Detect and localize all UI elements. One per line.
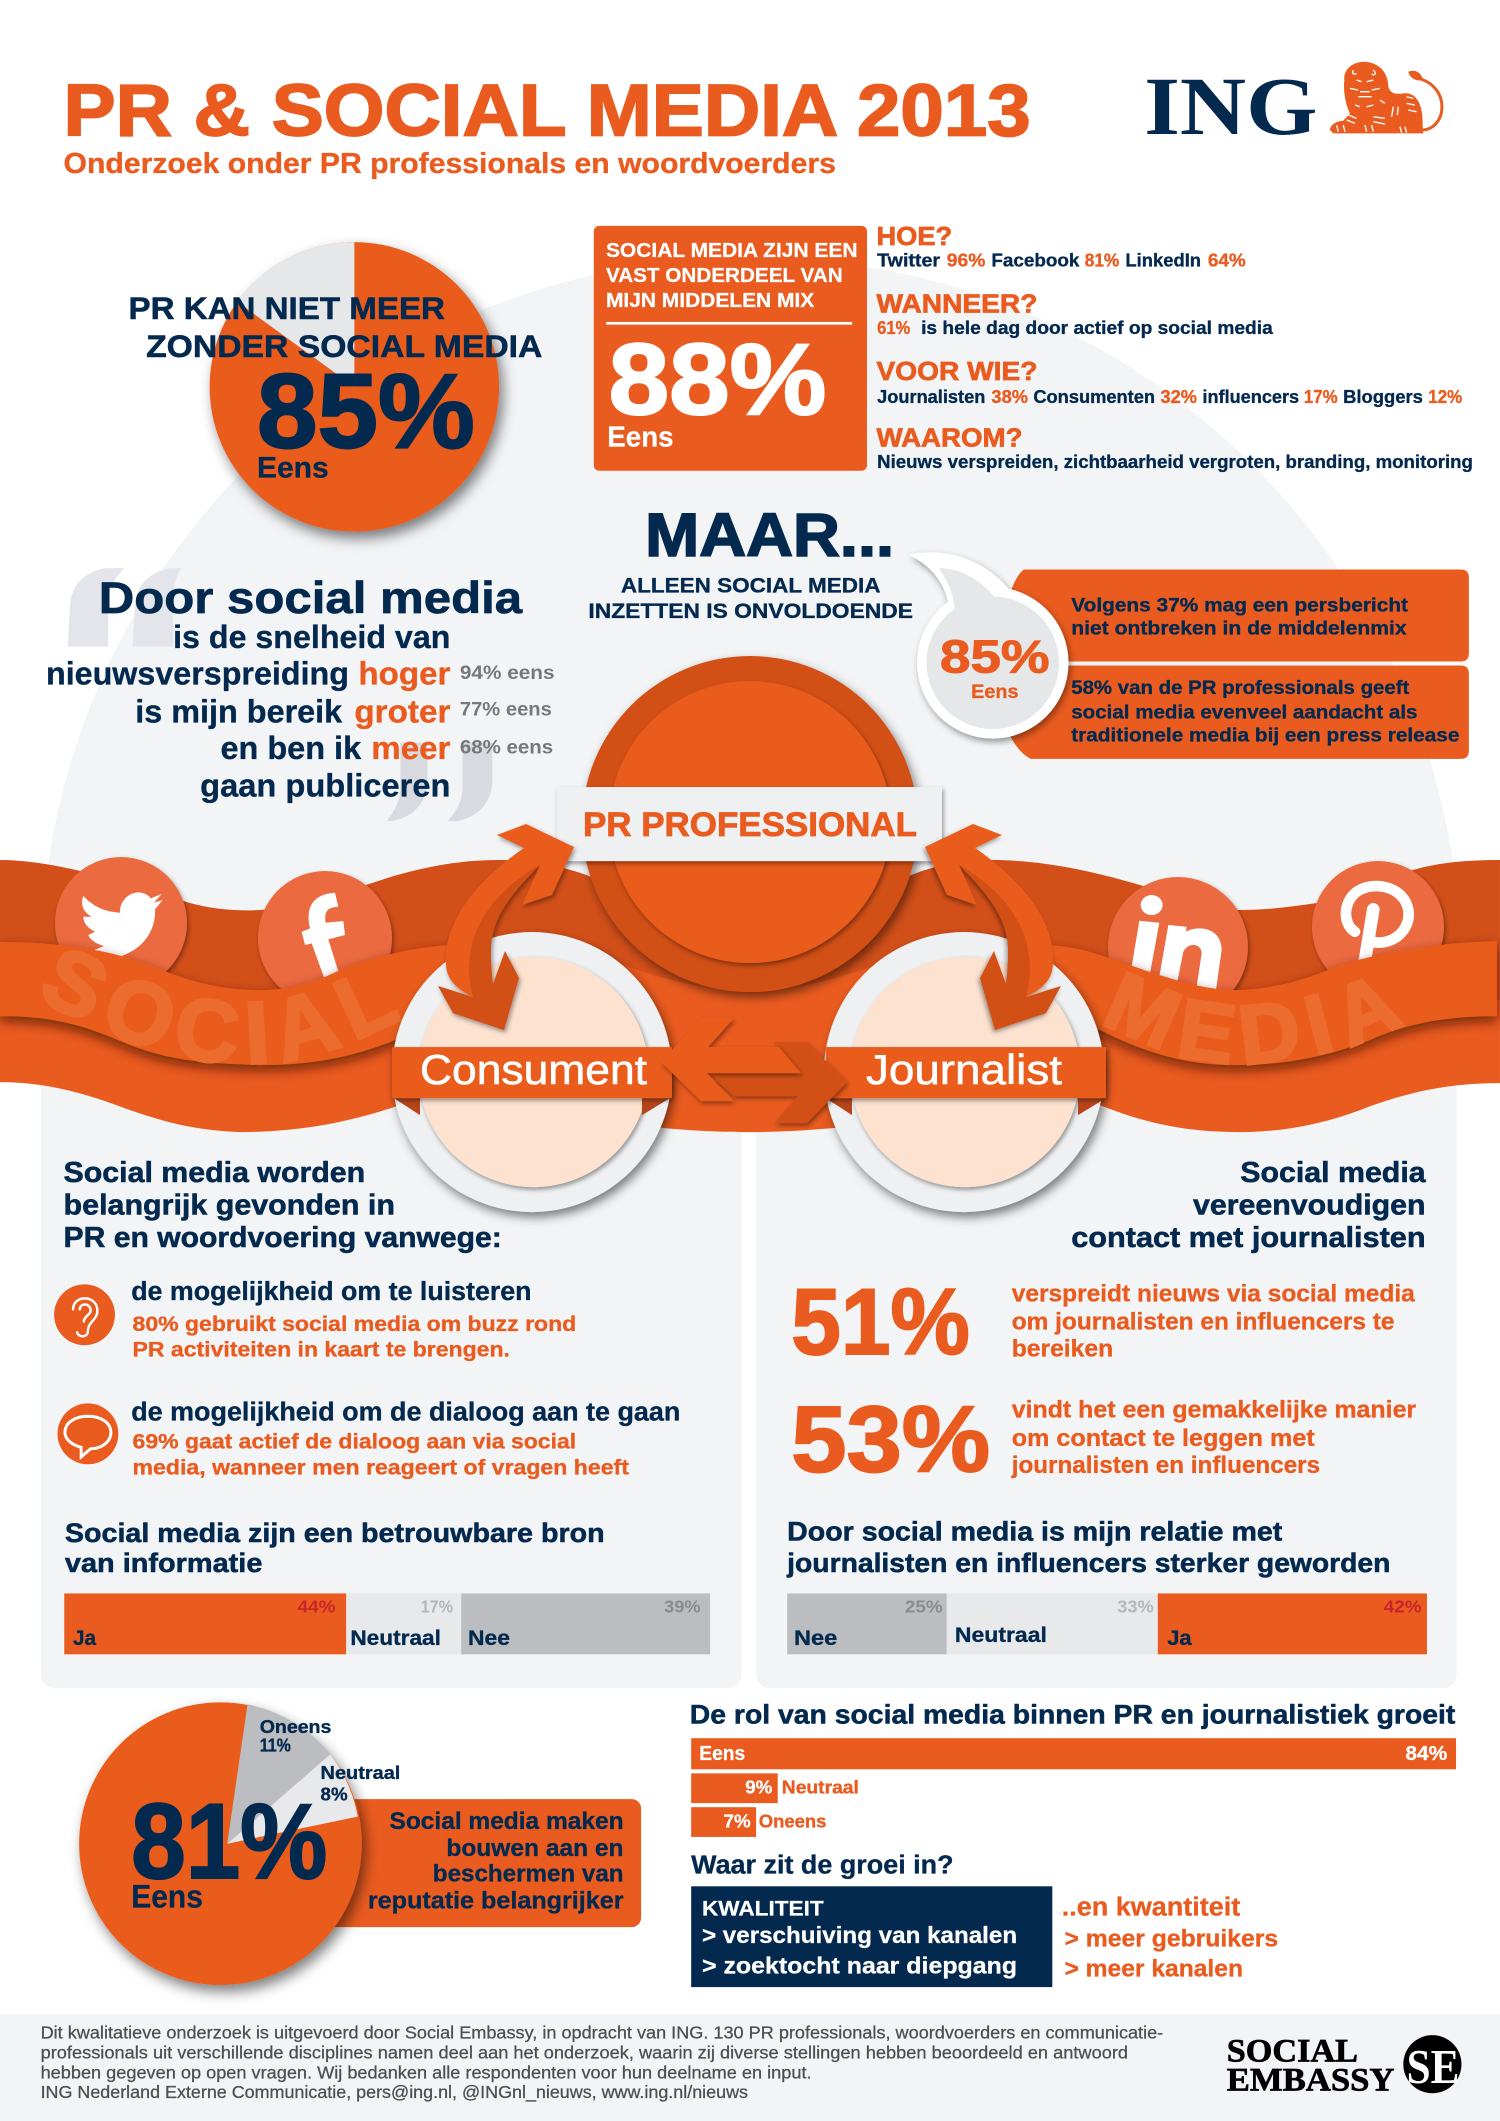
panel: 88% callout xyxy=(594,226,867,471)
text block: kwantiteit xyxy=(1062,1893,1278,1982)
text block: quote: 68% eens xyxy=(460,737,553,758)
text block: dialogue: 69% gaat actief de dialoog aan via social xyxy=(133,1429,576,1454)
text block: dialogue xyxy=(131,1398,680,1479)
panel: orange boxes right: social media evenveel aandacht als xyxy=(1071,701,1418,723)
heading: growing role: De rol van social media binnen PR en journalistiek groeit xyxy=(690,1699,1455,1729)
text block: wanneer: is hele dag door actief op social media xyxy=(921,317,1274,338)
logo: Social Embassy: SOCIAL xyxy=(1227,2032,1358,2069)
statistic: 51% xyxy=(791,1270,1415,1374)
text block: voor wie: 38% xyxy=(991,386,1028,407)
ribbon: lower band xyxy=(0,1000,1500,1132)
text block: voor wie: Journalisten xyxy=(877,386,985,407)
pie chart: 81% eens: Oneens xyxy=(260,1716,331,1737)
logo: ING: ING xyxy=(1144,60,1317,152)
text block: footer: ING Nederland Externe Communicatie, pers@ing.nl, @INGnl_nieuws, www.ing.nl/nieuws xyxy=(41,2082,748,2103)
title: PR & SOCIAL MEDIA 2013 xyxy=(64,70,1031,151)
statistic: 53%: vindt het een gemakkelijke manier xyxy=(1012,1397,1417,1424)
statistic: 51%: bereiken xyxy=(1012,1336,1113,1363)
text block: dialogue: media, wanneer men reageert of vragen heeft xyxy=(133,1454,629,1479)
statistic: 53% xyxy=(791,1388,1417,1492)
stacked bar: reliable source: 17% xyxy=(421,1596,453,1616)
panel: left background xyxy=(41,1028,742,1688)
text block: voor wie: 32% xyxy=(1161,386,1197,407)
panel: orange boxes right: Volgens 37% mag een persbericht xyxy=(1071,594,1409,616)
ribbon: right wave xyxy=(970,941,1497,1065)
text block: wanneer: WANNEER? xyxy=(876,290,1037,318)
ribbon: left wave xyxy=(0,942,530,1065)
text block: quote: gaan publiceren xyxy=(200,768,450,804)
node: journalist circle xyxy=(824,932,1104,1212)
heading: stronger relationship xyxy=(786,1517,1390,1578)
heading: left panel xyxy=(64,1157,502,1254)
heading: maar: ALLEEN SOCIAL MEDIA xyxy=(621,574,881,597)
heading: left panel: PR en woordvoering vanwege: xyxy=(64,1222,502,1254)
text block: footer xyxy=(41,2022,1163,2103)
node: consumer circle xyxy=(392,932,672,1212)
text block: voor wie: Consumenten xyxy=(1033,386,1155,407)
logo: Social Embassy xyxy=(1227,2032,1461,2099)
icon: ear xyxy=(54,1284,115,1345)
bar chart: growing role: Neutraal xyxy=(782,1777,859,1798)
icon: pinterest xyxy=(1312,861,1444,993)
stacked bar: reliable source: 39% xyxy=(664,1596,701,1616)
heading: right panel xyxy=(1071,1157,1426,1254)
text block: footer: hebben gegeven op open vragen. Wij bedanken alle respondenten voor hun deelname en input. xyxy=(41,2062,812,2082)
label: journalist xyxy=(826,1046,1106,1115)
stacked bar: reliable source: Nee xyxy=(468,1625,510,1650)
text block: quote: is de snelheid van xyxy=(173,619,450,655)
text block: hoe: 81% xyxy=(1085,249,1119,270)
panel: kwaliteit: KWALITEIT xyxy=(702,1895,824,1920)
label: journalist: Journalist xyxy=(866,1046,1062,1093)
panel: orange boxes right: 58% van de PR professionals geeft xyxy=(1071,677,1410,699)
logo: Social Embassy: SE xyxy=(1407,2040,1459,2094)
ribbon: dark upper band xyxy=(0,860,1500,1020)
pie heading: PR KAN NIET MEER xyxy=(128,290,445,326)
icon: twitter xyxy=(55,857,187,989)
statistic: 53%: om contact te leggen met xyxy=(1012,1425,1315,1452)
text block: waarom: WAAROM? xyxy=(876,424,1023,452)
heading: maar: MAAR... xyxy=(645,501,894,569)
text block: voor wie: VOOR WIE? xyxy=(876,358,1037,386)
heading: reliable source xyxy=(65,1518,605,1578)
text block: kwantiteit: ..en kwantiteit xyxy=(1062,1893,1241,1921)
text block: footer: Dit kwalitatieve onderzoek is uitgevoerd door Social Embassy, in opdracht van ING. 130 PR professionals, woordvoerders en communicatie- xyxy=(41,2022,1163,2042)
background arch xyxy=(41,257,1461,1082)
speech bubble: 85% eens: 85% xyxy=(940,630,1050,682)
text block: listening: de mogelijkheid om te luisteren xyxy=(131,1278,532,1306)
bar chart: growing role: Oneens xyxy=(759,1810,826,1831)
pie value: Eens xyxy=(257,451,329,484)
text block: voor wie: Bloggers xyxy=(1343,386,1423,407)
statistic: 53%: journalisten en influencers xyxy=(1011,1452,1320,1479)
text block: quote: en ben ik xyxy=(220,730,362,766)
panel: 88% callout: VAST ONDERDEEL VAN xyxy=(606,265,843,287)
bar chart: growing role: Eens xyxy=(699,1743,745,1765)
pie chart: 81% eens xyxy=(79,1702,400,1985)
pie chart: 81% eens: Eens xyxy=(131,1878,203,1914)
text block: hoe: 64% xyxy=(1208,249,1246,270)
pie heading xyxy=(128,290,542,364)
text block: listening: PR activiteiten in kaart te brengen. xyxy=(133,1337,510,1362)
panel: 88% callout: 88% xyxy=(609,323,826,436)
stacked bar: stronger relationship: 42% xyxy=(1384,1596,1422,1616)
panel: right background xyxy=(756,1028,1457,1688)
bar chart: growing role xyxy=(691,1738,1456,1837)
pie chart: 81% eens: 11% xyxy=(260,1735,291,1756)
heading: stronger relationship: Door social media is mijn relatie met xyxy=(787,1517,1282,1547)
panel: 88% callout: MIJN MIDDELEN MIX xyxy=(606,290,815,312)
arrow: consumer to PR xyxy=(438,824,574,1030)
icon: speech balloon xyxy=(57,1403,118,1464)
text block: quote: Door social media xyxy=(99,574,523,623)
text block: voor wie: 12% xyxy=(1428,386,1462,407)
icon: opening quote mark xyxy=(68,568,181,647)
panel: footer background xyxy=(0,2014,1500,2121)
heading: where is the growth: Waar zit de groei in? xyxy=(691,1851,954,1879)
stacked bar: reliable source: Neutraal xyxy=(350,1625,441,1650)
heading: maar xyxy=(588,501,913,623)
ribbon: center wave xyxy=(560,945,940,1105)
callout: reputation xyxy=(325,1799,641,1927)
speech bubble: 85% eens xyxy=(909,552,1069,739)
stacked bar: reliable source: 44% xyxy=(298,1596,336,1616)
text block: quote: meer xyxy=(371,730,451,766)
panel: kwaliteit: > zoektocht naar diepgang xyxy=(702,1953,1017,1979)
panel: kwaliteit xyxy=(691,1886,1052,1987)
bar chart: growing role: 84% xyxy=(1405,1743,1447,1765)
text block: hoe: Twitter xyxy=(877,249,940,270)
text block: hoe: LinkedIn xyxy=(1125,249,1201,270)
text block: footer: professionals uit verschillende disciplines namen deel aan het onderzoek, waarin zij diverse stellingen hebben beoordeeld en antwoord xyxy=(41,2042,1128,2062)
arrow: left xyxy=(661,1018,801,1101)
stacked bar: stronger relationship: 25% xyxy=(905,1596,943,1616)
text block: waarom: Nieuws verspreiden, zichtbaarheid vergroten, branding, monitoring xyxy=(877,451,1473,472)
heading: reliable source: Social media zijn een betrouwbare bron xyxy=(65,1518,605,1548)
heading: stronger relationship: journalisten en influencers sterker geworden xyxy=(786,1548,1390,1578)
pie chart: 81% eens: 8% xyxy=(321,1783,348,1804)
label: PR professional: PR PROFESSIONAL xyxy=(583,806,917,844)
panel: 88% callout: Eens xyxy=(607,421,674,453)
pie chart: 81% eens: 81% xyxy=(131,1781,327,1901)
statistic: 53%: 53% xyxy=(791,1388,990,1492)
heading: maar: INZETTEN IS ONVOLDOENDE xyxy=(588,600,913,623)
stacked bar: reliable source: Ja xyxy=(73,1625,97,1650)
stacked bar: stronger relationship: Neutraal xyxy=(955,1622,1047,1647)
stacked bar: stronger relationship xyxy=(787,1593,1427,1654)
callout: reputation: reputatie belangrijker xyxy=(368,1889,624,1915)
label: PR professional xyxy=(557,787,942,861)
text block: voor wie: 17% xyxy=(1304,386,1338,407)
text block: hoe: HOE? xyxy=(876,223,952,251)
text block: quote: 77% eens xyxy=(460,700,552,721)
bar chart: growing role: 7% xyxy=(724,1810,751,1831)
heading: reliable source: van informatie xyxy=(65,1548,262,1578)
text block: quote: groter xyxy=(354,693,451,729)
text block: quote: hoger xyxy=(358,655,451,691)
pie chart: 81% eens: Neutraal xyxy=(321,1762,400,1783)
text block: hoe xyxy=(876,223,1246,270)
bar chart: growing role: 9% xyxy=(745,1777,772,1798)
heading: left panel: belangrijk gevonden in xyxy=(64,1190,395,1222)
logo: ING xyxy=(1144,60,1442,152)
label: consument: Consument xyxy=(420,1046,647,1093)
heading: right panel: Social media xyxy=(1240,1157,1426,1189)
stacked bar: stronger relationship: 33% xyxy=(1117,1596,1154,1616)
text block: hoe: Facebook xyxy=(991,249,1080,270)
text block: listening: 80% gebruikt social media om buzz rond xyxy=(133,1311,576,1336)
ribbon diagram xyxy=(0,654,1500,1224)
label: MEDIA watermark: MEDIA xyxy=(1102,970,1406,1066)
pie chart: 85% eens xyxy=(128,242,542,532)
panel: orange boxes right: niet ontbreken in de middelenmix xyxy=(1071,617,1407,639)
panel: kwaliteit: > verschuiving van kanalen xyxy=(702,1922,1017,1948)
stacked bar: stronger relationship: Nee xyxy=(794,1625,837,1650)
text block: waarom xyxy=(876,424,1473,472)
heading: right panel: contact met journalisten xyxy=(1071,1222,1426,1254)
text block: dialogue: de mogelijkheid om de dialoog aan te gaan xyxy=(131,1398,680,1426)
text block: voor wie: influencers xyxy=(1202,386,1299,407)
icon: closing quote mark xyxy=(387,743,492,821)
text block: wanneer: 61% xyxy=(877,317,910,338)
callout: reputation: beschermen van xyxy=(433,1862,624,1888)
text block: voor wie xyxy=(876,358,1462,407)
statistic: 51%: 51% xyxy=(791,1270,970,1374)
arrow: journalist to PR xyxy=(925,824,1061,1030)
stacked bar: reliable source xyxy=(64,1593,710,1654)
callout: reputation: Social media maken xyxy=(390,1809,624,1835)
text block: quote: nieuwsverspreiding xyxy=(46,655,349,691)
pie value: 85% xyxy=(257,353,475,471)
label: SOCIAL watermark: SOCIAL xyxy=(42,950,402,1065)
heading: left panel: Social media worden xyxy=(64,1157,365,1189)
panel: orange boxes right: traditionele media bij een press release xyxy=(1071,724,1460,746)
panel: 88% callout: SOCIAL MEDIA ZIJN EEN xyxy=(606,240,858,262)
panel: right content xyxy=(786,1157,1427,1654)
pie heading: ZONDER SOCIAL MEDIA xyxy=(146,328,542,364)
panel: left content xyxy=(54,1157,710,1654)
icon: facebook xyxy=(258,871,392,1005)
text block: quote: is mijn bereik xyxy=(135,693,343,729)
label: consument xyxy=(392,1046,672,1115)
statistic: 51%: verspreidt nieuws via social media xyxy=(1012,1280,1415,1307)
panel: orange boxes right xyxy=(1008,569,1469,759)
statistic: 51%: om journalisten en influencers te xyxy=(1012,1309,1394,1336)
text block: quote xyxy=(46,574,555,804)
text block: quote: 94% eens xyxy=(460,663,555,684)
logo: Social Embassy: EMBASSY xyxy=(1227,2062,1395,2099)
callout: reputation: bouwen aan en xyxy=(446,1836,624,1862)
heading: right panel: vereenvoudigen xyxy=(1193,1190,1426,1222)
icon: linkedin xyxy=(1108,877,1248,1017)
speech bubble: 85% eens: Eens xyxy=(971,682,1018,703)
arrow: right xyxy=(707,1042,847,1123)
node: PR professional circle xyxy=(582,656,918,992)
text block: hoe: 96% xyxy=(947,249,985,270)
text block: kwantiteit: > meer gebruikers xyxy=(1064,1926,1278,1953)
text block: listening xyxy=(131,1278,576,1362)
text block: wanneer xyxy=(876,290,1274,338)
text block: kwantiteit: > meer kanalen xyxy=(1064,1955,1243,1982)
subtitle: Onderzoek onder PR professionals en woordvoerders xyxy=(64,148,836,180)
stacked bar: stronger relationship: Ja xyxy=(1167,1625,1193,1650)
icon: ING lion xyxy=(1330,62,1442,133)
